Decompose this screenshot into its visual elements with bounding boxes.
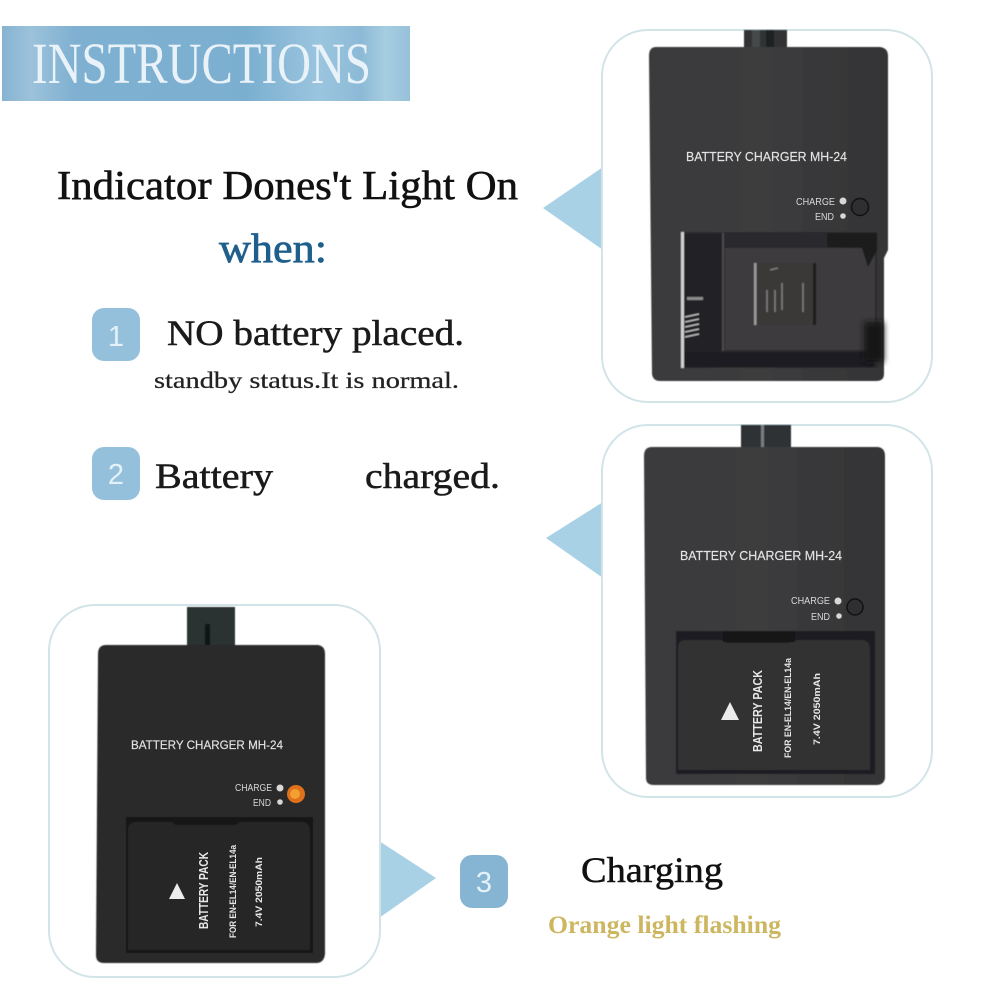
step 3 note: Orange light flashing	[548, 912, 782, 939]
subheading: when: when:	[219, 225, 327, 271]
badge: number 3: 3	[476, 867, 492, 899]
badge: number 3	[460, 855, 508, 908]
indicator legend: END	[253, 798, 271, 809]
shadow in cradle corner	[864, 322, 884, 362]
charger photo, empty cradle	[649, 30, 888, 381]
step 1 note: standby status.It is normal.	[154, 368, 459, 393]
indicator legend	[796, 197, 868, 223]
panel: charging	[49, 605, 380, 977]
charger label: BATTERY CHARGER MH-24	[680, 549, 842, 563]
arrow: pointer to panel 2	[546, 502, 603, 578]
battery labels: BATTERY PACK	[197, 852, 211, 929]
badge: number 2	[92, 447, 140, 500]
panel frame	[49, 605, 380, 977]
arrow: pointer from panel 3	[379, 841, 436, 918]
step 2	[92, 447, 500, 500]
badge: number 1	[92, 308, 140, 361]
battery labels	[750, 657, 823, 758]
battery labels: 7.4V 2050mAh	[812, 673, 823, 745]
indicator legend: END	[815, 212, 834, 223]
battery labels: BATTERY PACK	[750, 670, 765, 752]
charger photo with battery	[644, 425, 885, 785]
charger photo with battery	[96, 607, 325, 963]
step 1	[92, 308, 464, 393]
orange charging light	[287, 785, 305, 803]
panel frame	[602, 425, 932, 797]
step 2 text right: charged.	[365, 456, 500, 496]
step 3 title: Charging	[581, 850, 723, 890]
battery labels: 7.4V 2050mAh	[254, 857, 265, 927]
heading banner: INSTRUCTIONS: INSTRUCTIONS	[32, 31, 371, 96]
panel: charged	[602, 425, 932, 797]
battery labels	[197, 844, 265, 938]
indicator legend: CHARGE	[235, 783, 272, 794]
heading: Indicator Dones't Light On: Indicator Dones't Light On	[57, 162, 518, 208]
battery triangle	[169, 883, 185, 899]
panel frame	[602, 30, 932, 402]
step 1 title: NO battery placed.	[167, 313, 464, 353]
badge: number 2: 2	[108, 459, 124, 491]
indicator legend	[235, 783, 284, 809]
battery labels: FOR EN-EL14/EN-EL14a	[783, 657, 794, 758]
panel: empty charger	[602, 30, 932, 402]
indicator legend: CHARGE	[796, 197, 835, 208]
step 3	[460, 850, 782, 939]
indicator legend: END	[811, 612, 830, 623]
charger label: BATTERY CHARGER MH-24	[131, 738, 283, 752]
arrow: pointer to panel 1	[543, 167, 603, 250]
indicator legend	[791, 596, 863, 623]
badge: number 1: 1	[108, 321, 124, 353]
step 2 text left: Battery	[155, 456, 273, 496]
charger label: BATTERY CHARGER MH-24	[686, 150, 847, 164]
battery triangle	[721, 702, 739, 720]
battery labels: FOR EN-EL14/EN-EL14a	[228, 844, 239, 938]
indicator legend: CHARGE	[791, 596, 830, 607]
